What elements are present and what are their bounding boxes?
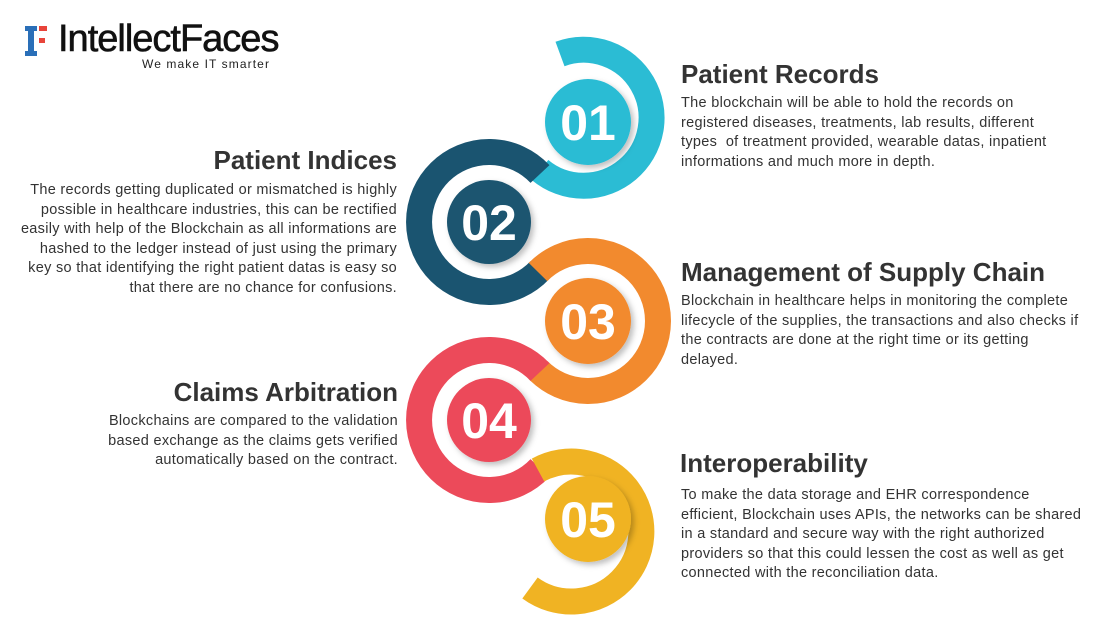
text: Claims Arbitration: automatically based on the contract. [155,452,398,468]
text: Patient Indices: key so that identifying the right patient datas is easy so [28,260,397,276]
text: Patient Indices: hashed to the ledger instead of just using the primary [40,241,397,257]
text: Patient Records: types of treatment provided, wearable datas, inpatient [681,134,1047,150]
text: Supply Chain: delayed. [681,352,738,368]
text: Patient Indices: that there are no chance for confusions. [129,280,397,296]
ring 05: 05 [560,492,616,548]
heading: Patient Records: Patient Records [681,59,879,89]
text: Patient Records: The blockchain will be able to hold the records on [681,95,1014,111]
ring 05 [530,462,641,602]
text: Claims Arbitration [108,413,398,468]
heading: Patient Indices: Patient Indices [214,145,397,175]
ring 03: 03 [560,294,616,350]
text: Patient Records: informations and much more in depth. [681,154,935,170]
heading: Interoperability: Interoperability [680,448,868,478]
text: Interoperability: in a standard and secure way with the right authorized [681,526,1045,542]
logo [25,18,278,71]
text: Supply Chain: lifecycle of the supplies, the transactions and also checks if [681,313,1078,329]
heading: Claims Arbitration: Claims Arbitration [174,377,398,407]
text: Claims Arbitration: based exchange as the claims gets verified [108,433,398,449]
text: Claims Arbitration: Blockchains are compared to the validation [109,413,398,429]
text: Interoperability: efficient, Blockchain uses APIs, the networks can be shared [681,507,1081,523]
text: Supply Chain: the contracts are done at the right time or its getting [681,332,1029,348]
text: Interoperability: connected with the reconciliation data. [681,565,939,581]
text: Patient Indices: possible in healthcare industries, this can be rectified [41,202,397,218]
text: Patient Records [681,95,1047,170]
text: Interoperability: To make the data storage and EHR correspondence [681,487,1030,503]
logo: IntellectFaces [58,18,278,60]
icon: IF mark [25,26,47,56]
text: Patient Indices: The records getting duplicated or mismatched is highly [30,182,397,198]
logo: We make IT smarter [142,57,270,71]
text: Patient Indices: easily with help of the Blockchain as all informations are [21,221,397,237]
ring 01: 01 [560,95,616,151]
heading: Management of Supply Chain: Management of Supply Chain [681,257,1045,287]
text: Patient Records: registered diseases, treatments, lab results, different [681,115,1034,131]
ring 02 [419,152,540,292]
ring 04 [419,350,540,490]
text: Supply Chain: Blockchain in healthcare helps in monitoring the complete [681,293,1068,309]
ring 02: 02 [461,195,517,251]
text: Patient Indices [21,182,397,296]
text: Supply Chain [681,293,1078,368]
ring 03 [538,251,658,391]
text: Interoperability: providers so that this could lessen the cost as well as get [681,546,1064,562]
ring 04: 04 [461,393,517,449]
text: Interoperability [681,487,1081,581]
ring 01 [540,50,652,186]
